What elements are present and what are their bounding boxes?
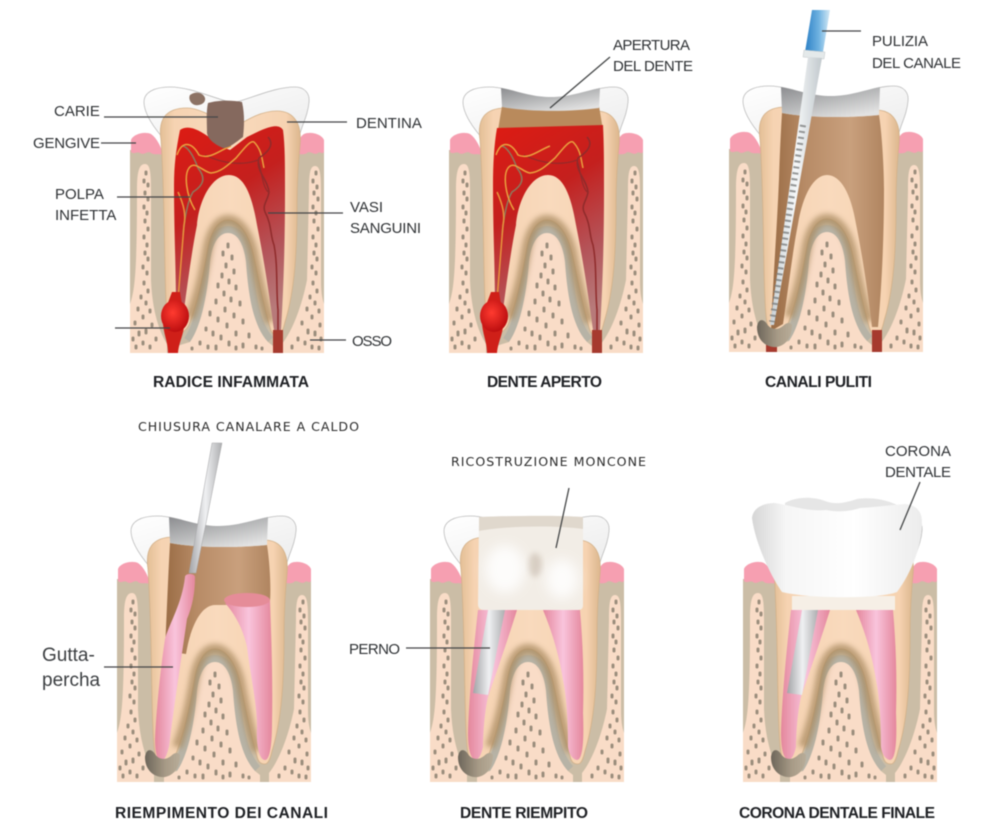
panel: corona dentale finale: [739, 443, 951, 822]
label: polpa infetta: POLPA: [55, 186, 104, 203]
tooth illustration: opened tooth: [449, 87, 643, 353]
icon: heated plugger: [189, 443, 222, 573]
label: corona dentale: CORONA: [885, 443, 951, 460]
icon: endodontic file: [770, 10, 830, 325]
label: gengive: GENGIVE: [33, 135, 100, 152]
label: corona dentale: [885, 443, 951, 530]
label: ricostruzione moncone: RICOSTRUZIONE MONCONE: [451, 454, 646, 469]
label: dentina: DENTINA: [356, 115, 422, 132]
label: apertura del dente: DEL DENTE: [613, 58, 693, 75]
label: apertura del dente: APERTURA: [613, 37, 690, 54]
caption: dente riempito: DENTE RIEMPITO: [460, 805, 588, 822]
panel: radice infammata: [33, 87, 422, 391]
icon: dental crown: [752, 498, 922, 597]
caption: corona dentale finale: CORONA DENTALE FINALE: [739, 805, 935, 822]
pointer line: abscess: [115, 327, 170, 329]
label: polpa infetta: INFETTA: [55, 207, 116, 224]
panel: canali puliti: [729, 10, 961, 391]
tooth illustration: filling the canals: [117, 516, 311, 782]
label: dentina: [287, 115, 422, 132]
label: vasi sanguini: SANGUINI: [350, 220, 421, 237]
label: gengive: [33, 135, 136, 152]
tooth illustration: crowned tooth: [743, 516, 937, 782]
panel: dente riempito: [349, 454, 646, 822]
label: osso: [310, 333, 392, 350]
label: ricostruzione moncone: [451, 454, 646, 548]
label: guttaperca: [42, 645, 173, 691]
label: osso: OSSO: [352, 333, 392, 350]
tooth illustration: filled tooth: [430, 516, 624, 782]
label: corona dentale: DENTALE: [885, 464, 951, 481]
label: vasi sanguini: [268, 199, 421, 237]
caption: radice infammata: RADICE INFAMMATA: [153, 374, 309, 391]
caption: dente aperto: DENTE APERTO: [487, 374, 602, 391]
label: pulizia del canale: DEL CANALE: [872, 55, 961, 72]
caption: riempimento dei canali: RIEMPIMENTO DEI CANALI: [115, 805, 328, 822]
label: vasi sanguini: VASI: [350, 199, 383, 216]
label: chiusura canalare a caldo: CHIUSURA CANALARE A CALDO: [138, 419, 359, 434]
panel: dente aperto: [449, 37, 693, 391]
label: polpa infetta: [55, 186, 190, 224]
tooth illustration: cleaned canals: [729, 86, 923, 352]
label: guttaperca: percha: [42, 670, 101, 691]
caption: canali puliti: CANALI PULITI: [765, 374, 872, 391]
label: pulizia del canale: PULIZIA: [872, 33, 928, 50]
panel: riempimento dei canali: [42, 419, 359, 822]
label: apertura del dente: [550, 37, 693, 108]
tooth illustration: infected root: [130, 87, 324, 353]
label: perno: PERNO: [349, 641, 400, 658]
label: guttaperca: Gutta-: [42, 645, 95, 666]
label: pulizia del canale: [822, 31, 961, 72]
label: carie: CARIE: [54, 103, 100, 120]
